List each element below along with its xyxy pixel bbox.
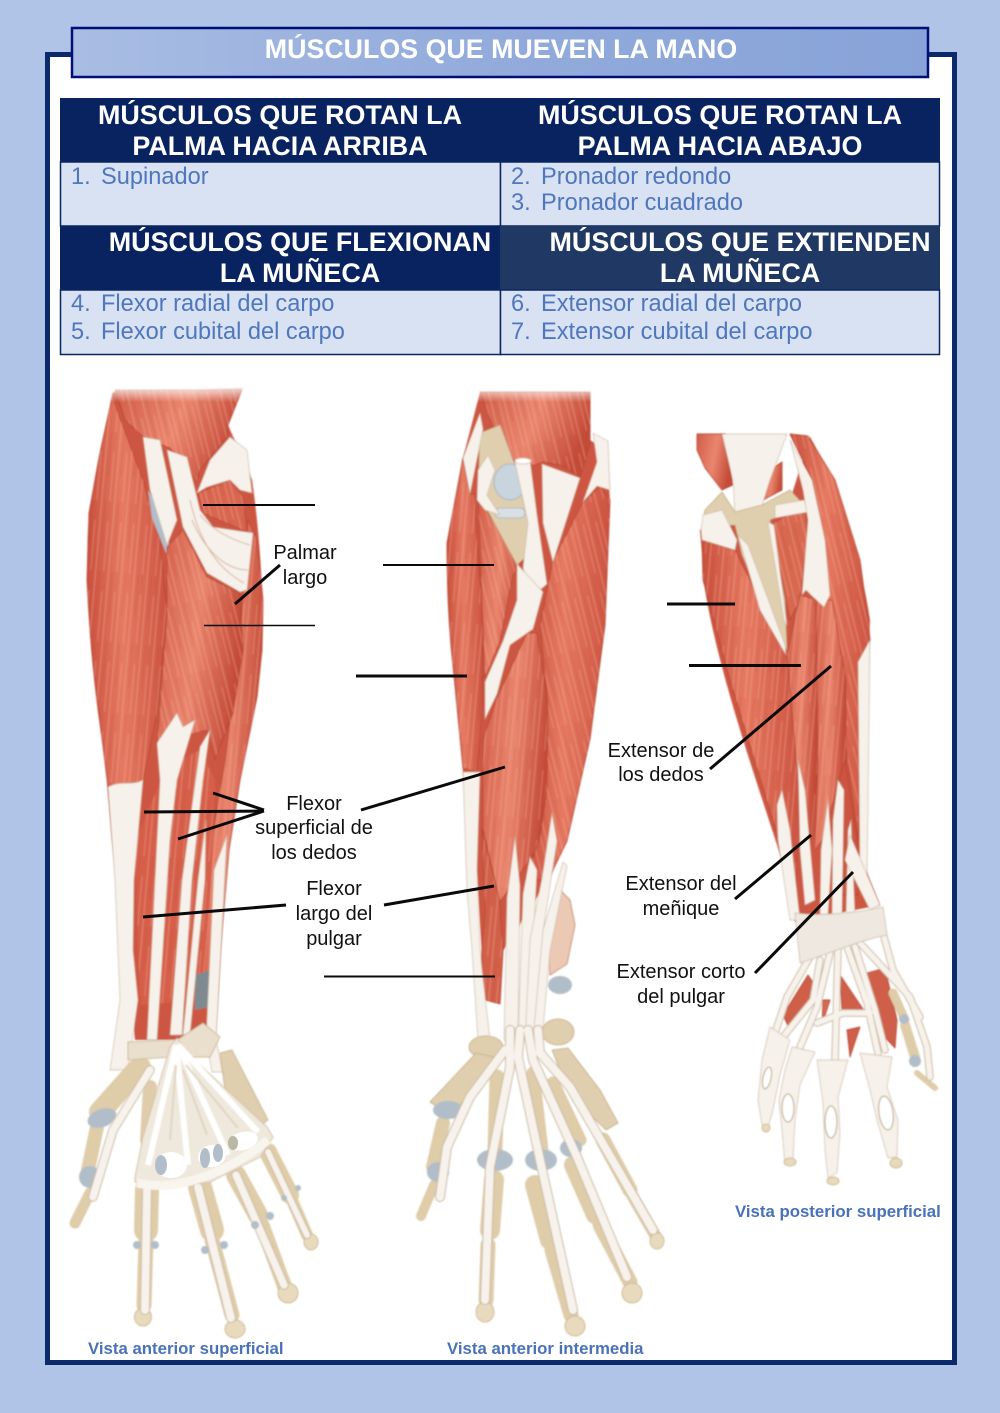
forearm muscles xyxy=(697,434,880,922)
label: Palmar largo: largo xyxy=(283,567,327,589)
list: flexors: Flexor radial del carpo xyxy=(101,291,334,317)
finger 5 xyxy=(268,1152,318,1250)
header: palm down: MÚSCULOS QUE ROTAN LA xyxy=(538,99,902,130)
label: Flexor superficial de los dedos: Flexor xyxy=(286,793,342,815)
finger 3 xyxy=(525,1149,585,1336)
list: supinator xyxy=(60,162,500,226)
label: Flexor superficial de los dedos: superficial de xyxy=(255,817,373,839)
header: palm up: MÚSCULOS QUE ROTAN LA xyxy=(98,99,462,130)
finger 2 xyxy=(860,1053,902,1168)
list: pronators: 2. xyxy=(511,164,531,190)
list: supinator: Supinador xyxy=(101,164,209,190)
illustration: posterior superficial forearm xyxy=(697,434,935,1185)
forearm muscles xyxy=(87,388,263,1040)
label: Flexor largo del pulgar: Flexor xyxy=(306,878,362,900)
label: Flexor superficial de los dedos: los dedos xyxy=(271,842,357,864)
dorsal hand muscles xyxy=(783,968,897,1057)
header: wrist flexors xyxy=(60,226,500,290)
hand bones xyxy=(75,1050,318,1338)
finger 2 xyxy=(476,1149,513,1322)
hand of posterior view xyxy=(758,907,935,1185)
header: palm down xyxy=(500,98,940,162)
title banner xyxy=(72,28,928,77)
header: wrist extensors xyxy=(500,226,940,290)
extensor retinaculum xyxy=(795,907,887,963)
list: flexors: 4. xyxy=(71,291,91,317)
label: Palmar largo: Palmar xyxy=(273,542,337,564)
title banner: MÚSCULOS QUE MUEVEN LA MANO xyxy=(265,33,737,64)
list: extensors: Extensor cubital del carpo xyxy=(541,319,812,345)
illustration: anterior superficial forearm xyxy=(75,384,318,1338)
label leader lines xyxy=(143,505,853,976)
label: Extensor de los dedos: Extensor de xyxy=(608,740,714,762)
header: palm up xyxy=(60,98,500,162)
thumb xyxy=(893,993,935,1088)
finger 4 xyxy=(236,1175,298,1303)
list: flexors: 5. xyxy=(71,319,91,345)
header: wrist flexors: LA MUÑECA xyxy=(220,257,380,288)
header: palm down: PALMA HACIA ABAJO xyxy=(578,131,862,161)
hand bones and tendons xyxy=(421,1019,664,1336)
finger 5 xyxy=(603,1140,664,1249)
list: flexors xyxy=(60,290,500,354)
finger 4 xyxy=(560,1139,642,1303)
caption: anterior superficial view: Vista anterior superficial xyxy=(88,1339,284,1358)
top fade xyxy=(100,384,255,402)
list: pronators: 3. xyxy=(511,190,531,216)
finger 3 xyxy=(198,1187,245,1338)
tendons and ulna xyxy=(701,434,880,920)
forearm muscles xyxy=(447,392,610,1004)
list: pronators: Pronador cuadrado xyxy=(541,190,743,216)
caption: posterior superficial view: Vista posterior superficial xyxy=(735,1202,941,1221)
list: extensors: 7. xyxy=(511,319,531,345)
palm openings xyxy=(155,1128,260,1178)
bones, cartilage and tendons at the elbow xyxy=(463,413,610,719)
illustration: anterior intermediate forearm xyxy=(421,384,664,1336)
list: extensors: Extensor radial del carpo xyxy=(541,291,802,317)
list: extensors: 6. xyxy=(511,291,531,317)
header: palm up: PALMA HACIA ARRIBA xyxy=(132,131,428,161)
list: extensors xyxy=(500,290,940,354)
finger 5 xyxy=(758,1027,790,1132)
top fade xyxy=(470,384,600,402)
caption: anterior intermediate view: Vista anterior intermedia xyxy=(447,1339,644,1358)
finger 4 xyxy=(779,1047,815,1166)
header: wrist extensors: MÚSCULOS QUE EXTIENDEN xyxy=(550,226,930,257)
label: Flexor largo del pulgar: pulgar xyxy=(306,928,362,950)
header: wrist extensors: LA MUÑECA xyxy=(660,257,820,288)
label: Extensor del meñique: meñique xyxy=(643,898,719,920)
tendons of forearm xyxy=(108,437,253,1072)
list: flexors: Flexor cubital del carpo xyxy=(101,319,345,345)
label: Extensor corto del pulgar: del pulgar xyxy=(637,986,725,1008)
label: Extensor corto del pulgar: Extensor corto xyxy=(617,961,745,983)
finger 2 xyxy=(133,1190,159,1326)
header: wrist flexors: MÚSCULOS QUE FLEXIONAN xyxy=(109,226,491,257)
list: pronators xyxy=(500,162,940,226)
finger 3 xyxy=(817,1060,848,1185)
label: Extensor del meñique: Extensor del xyxy=(625,873,737,895)
forearm tendons xyxy=(463,772,567,1040)
wrist band and palmar aponeurosis xyxy=(93,1023,273,1197)
list: pronators: Pronador redondo xyxy=(541,164,731,190)
muscle groups table xyxy=(60,98,940,354)
list: supinator: 1. xyxy=(71,164,91,190)
label: Flexor largo del pulgar: largo del xyxy=(296,903,372,925)
label: Extensor de los dedos: los dedos xyxy=(618,764,704,786)
